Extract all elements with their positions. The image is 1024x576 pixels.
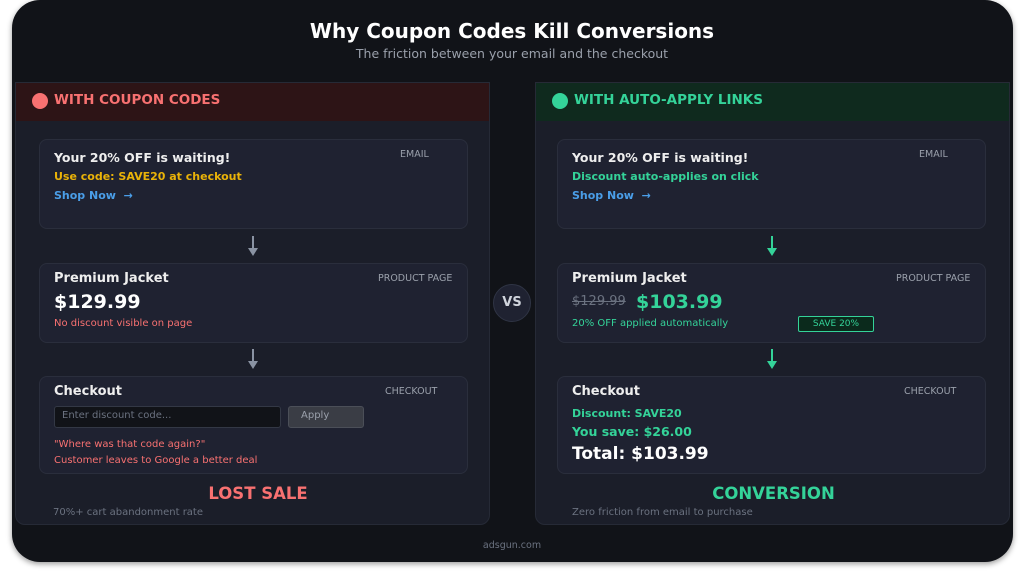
card: product page: Premium Jacket [572, 271, 687, 286]
card: checkout [39, 376, 468, 474]
discount code input [54, 406, 281, 428]
card: email: EMAIL [400, 149, 429, 160]
card: checkout: You save: $26.00 [572, 424, 692, 439]
result: conversion: CONVERSION [712, 484, 835, 503]
panel: with coupon codes: 70%+ cart abandonment rate [53, 507, 203, 518]
card: checkout: Discount: SAVE20 [572, 407, 682, 420]
card: email: Shop Now → [572, 189, 651, 202]
result: lost sale: LOST SALE [208, 484, 308, 503]
card: email: EMAIL [919, 149, 948, 160]
card: email: Use code: SAVE20 at checkout [54, 170, 242, 183]
card: product page: $103.99 [636, 291, 723, 313]
card: product page: $129.99 [54, 291, 141, 313]
subtitle: The friction between your email and the checkout [356, 46, 668, 61]
card: email [39, 139, 468, 229]
card: email: Shop Now → [54, 189, 133, 202]
card: email: Discount auto-applies on click [572, 170, 759, 183]
header: with coupon codes [16, 83, 489, 121]
apply button: Apply [301, 410, 329, 421]
header: with auto-apply links [536, 83, 1009, 121]
header: with auto-apply links: WITH AUTO-APPLY LINKS [574, 92, 763, 108]
card: product page: $129.99 [572, 294, 626, 309]
card: product page: Premium Jacket [54, 271, 169, 286]
card: product page [557, 263, 986, 343]
vs badge [493, 284, 531, 322]
panel: with auto-apply links: Zero friction from email to purchase [572, 507, 753, 518]
arrow [248, 349, 258, 369]
card: checkout: Total: $103.99 [572, 444, 709, 464]
card: checkout: Checkout [54, 384, 122, 399]
panel: with coupon codes [15, 82, 490, 525]
panel: with auto-apply links [535, 82, 1010, 525]
card: product page: 20% OFF applied automatically [572, 318, 728, 329]
apply button [288, 406, 364, 428]
title: Why Coupon Codes Kill Conversions [310, 19, 714, 43]
discount code input: Enter discount code... [62, 410, 171, 421]
card: product page: PRODUCT PAGE [896, 273, 970, 284]
arrow [767, 236, 777, 256]
footer: adsgun.com [483, 540, 541, 551]
arrow [248, 236, 258, 256]
card: email: Your 20% OFF is waiting! [54, 150, 230, 165]
header: with coupon codes: WITH COUPON CODES [54, 92, 220, 108]
vs badge: VS [502, 295, 522, 310]
card: checkout: CHECKOUT [904, 386, 956, 397]
card: product page [39, 263, 468, 343]
card: checkout: CHECKOUT [385, 386, 437, 397]
card: email: Your 20% OFF is waiting! [572, 150, 748, 165]
card: checkout: Checkout [572, 384, 640, 399]
save badge: SAVE 20% [813, 319, 859, 329]
card: checkout [557, 376, 986, 474]
save badge [798, 316, 874, 332]
card: checkout: "Where was that code again?" [54, 439, 205, 450]
card: checkout: Customer leaves to Google a better deal [54, 454, 257, 466]
card: email [557, 139, 986, 229]
arrow [767, 349, 777, 369]
card: product page: PRODUCT PAGE [378, 273, 452, 284]
card: product page: No discount visible on page [54, 318, 192, 329]
